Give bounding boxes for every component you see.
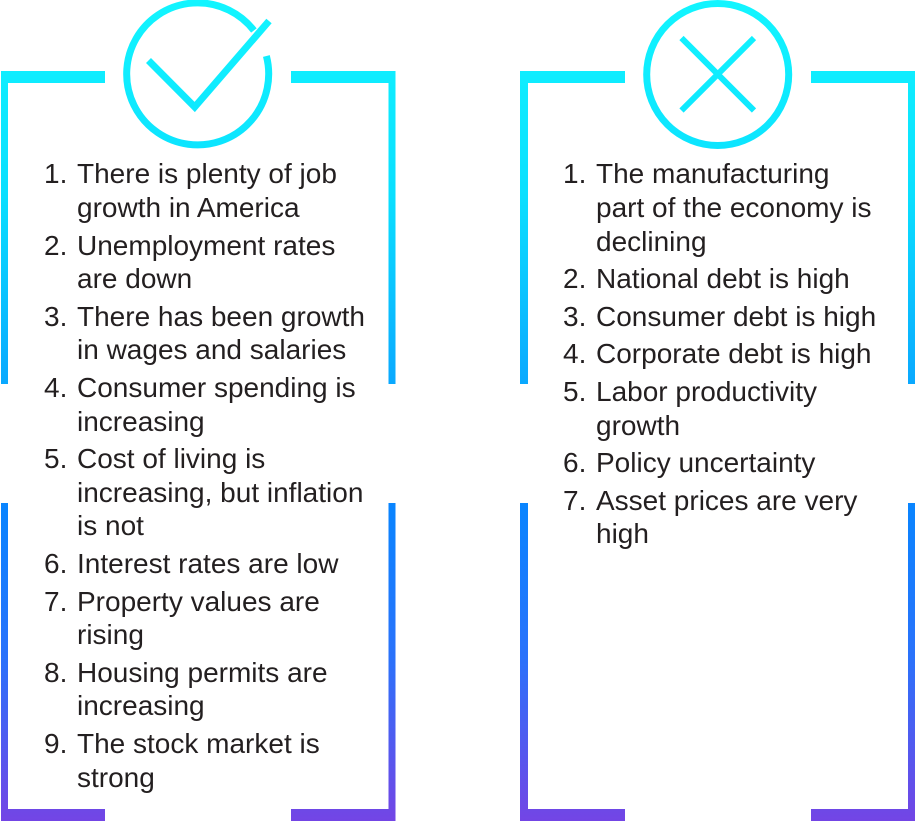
item 4: 4. [563, 338, 586, 369]
item 4 [44, 372, 356, 437]
item 4: 4. [44, 372, 67, 403]
item 8: Housing permits are [77, 657, 328, 688]
item 1 [44, 158, 337, 223]
item 7: 7. [563, 485, 586, 516]
item 1: part of the economy is [596, 192, 871, 223]
panel: negative indicators [520, 4, 915, 821]
item 5: is not [77, 510, 144, 541]
item 3: in wages and salaries [77, 334, 346, 365]
item 4: Consumer spending is [77, 372, 356, 403]
item 6: 6. [44, 548, 67, 579]
icon: check mark in circle [127, 3, 269, 145]
item 2 [44, 230, 335, 294]
item 8 [44, 657, 328, 721]
item 2: 2. [563, 263, 586, 294]
item 5: Cost of living is [77, 443, 265, 474]
item 3: 3. [44, 301, 67, 332]
item 6: Policy uncertainty [596, 447, 815, 478]
frame: left panel brackets [1, 71, 396, 821]
frame: right panel brackets [520, 71, 915, 821]
item 2: are down [77, 263, 192, 294]
icon: cross in circle [647, 4, 789, 146]
item 7: Asset prices are very [596, 485, 857, 516]
item 9: 9. [44, 728, 67, 759]
item 7: 7. [44, 586, 67, 617]
item 1: The manufacturing [596, 158, 829, 189]
item 2: 2. [44, 230, 67, 261]
list: negative indicators [563, 158, 876, 549]
item 8: increasing [77, 690, 205, 721]
item 7 [44, 586, 320, 650]
item 1: There is plenty of job [77, 158, 337, 189]
item 7: rising [77, 619, 144, 650]
item 9 [44, 728, 320, 793]
item 5: 5. [44, 443, 67, 474]
item 3: There has been growth [77, 301, 365, 332]
item 8: 8. [44, 657, 67, 688]
item 3 [44, 301, 365, 365]
item 3: Consumer debt is high [596, 301, 876, 332]
item 5 [563, 376, 817, 441]
item 9: The stock market is [77, 728, 320, 759]
item 9: strong [77, 762, 155, 793]
item 2: Unemployment rates [77, 230, 335, 261]
item 1: growth in America [77, 192, 300, 223]
panel: positive indicators [1, 3, 396, 821]
item 3: 3. [563, 301, 586, 332]
item 6: 6. [563, 447, 586, 478]
item 7 [563, 485, 857, 549]
item 1 [563, 158, 871, 257]
item 4: increasing [77, 406, 205, 437]
item 1: 1. [563, 158, 586, 189]
item 5: Labor productivity [596, 376, 817, 407]
item 5: growth [596, 410, 680, 441]
item 1: 1. [44, 158, 67, 189]
item 4: Corporate debt is high [596, 338, 872, 369]
item 5: increasing, but inflation [77, 477, 363, 508]
item 7: high [596, 518, 649, 549]
item 6: Interest rates are low [77, 548, 339, 579]
list: positive indicators [44, 158, 365, 793]
item 5 [44, 443, 363, 541]
item 5: 5. [563, 376, 586, 407]
item 2: National debt is high [596, 263, 850, 294]
item 1: declining [596, 226, 707, 257]
item 7: Property values are [77, 586, 320, 617]
